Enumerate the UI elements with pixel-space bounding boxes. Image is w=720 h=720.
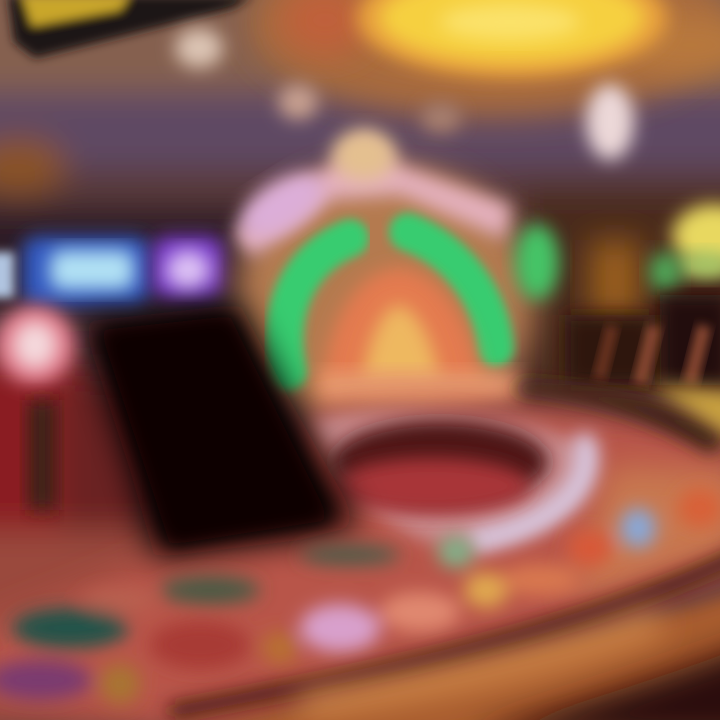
top-left dark sign <box>8 0 255 58</box>
table rim <box>170 555 720 720</box>
green arcs <box>284 238 350 372</box>
right side slot machines <box>565 204 720 386</box>
orange arch <box>322 268 482 392</box>
foreground black silhouette <box>82 304 360 558</box>
pink light on left <box>0 305 75 510</box>
central wheel arch <box>230 129 559 435</box>
roulette bowl <box>310 411 591 550</box>
ceiling chandelier <box>250 0 720 117</box>
left screens <box>0 236 224 306</box>
yellow center <box>362 305 440 392</box>
table chips and betting layout <box>0 488 720 704</box>
table surface <box>0 382 720 720</box>
pink halo <box>232 135 512 258</box>
ceiling lights <box>175 28 634 160</box>
